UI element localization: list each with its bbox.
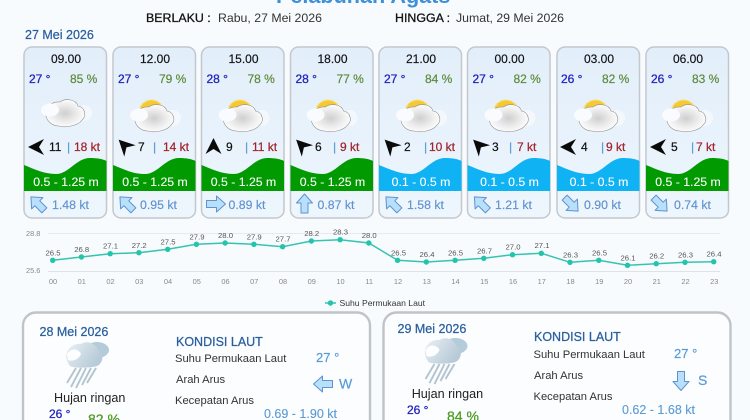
valid from: BERLAKU : xyxy=(146,11,211,25)
panel: 29 Mei 2026: 0.62 - 1.68 kt xyxy=(622,403,695,417)
line chart: sea surface temperature: 26.3 xyxy=(678,250,693,260)
icon: wind direction xyxy=(290,134,313,157)
panel: 18.00 forecast: 0.5 - 1.25 m xyxy=(300,175,365,189)
icon: light rain xyxy=(66,342,109,388)
line chart: sea surface temperature: 28.0 xyxy=(218,231,233,240)
panel: 00.00 forecast: 1.21 kt xyxy=(495,198,532,212)
line chart: sea surface temperature: 13 xyxy=(423,277,431,286)
panel: 03.00 forecast: 03.00 xyxy=(584,52,614,66)
panel: 15.00 forecast: 0.5 - 1.25 m xyxy=(211,175,276,189)
panel: 21.00 forecast: 84 % xyxy=(425,72,453,86)
line chart: sea surface temperature: 23 xyxy=(710,277,718,286)
panel: 28 Mei 2026: Hujan ringan xyxy=(54,391,125,405)
icon: partly cloudy xyxy=(306,100,358,132)
panel: 12.00 forecast: 0.5 - 1.25 m xyxy=(122,175,188,189)
panel: 03.00 forecast: 0.1 - 0.5 m xyxy=(570,175,628,189)
line chart: sea surface temperature: 26.5 xyxy=(592,248,607,258)
panel: 06.00 forecast: 7 kt xyxy=(696,140,716,154)
panel: 21.00 forecast: 1.58 kt xyxy=(407,198,444,212)
panel: 06.00 forecast: 06.00 xyxy=(673,52,703,66)
panel: 29 Mei 2026: KONDISI LAUT xyxy=(534,330,621,344)
icon: wind direction xyxy=(206,138,222,154)
panel: 28 Mei 2026: Arah Arus xyxy=(176,374,226,386)
panel: 00.00 forecast: 7 kt xyxy=(517,140,537,154)
panel: 03.00 forecast: 26 ° xyxy=(561,72,583,86)
panel: 15.00 forecast: | xyxy=(245,140,248,154)
line chart: sea surface temperature: 27.7 xyxy=(276,234,290,244)
panel: 29 Mei 2026 xyxy=(384,312,730,420)
panel: 15.00 forecast: 11 kt xyxy=(252,140,278,154)
panel: 12.00 forecast: 14 kt xyxy=(163,140,190,154)
line chart: sea surface temperature: 20 xyxy=(624,277,632,286)
line chart: sea surface temperature: 27.2 xyxy=(132,241,147,250)
line chart: sea surface temperature: 27.9 xyxy=(190,232,204,242)
panel: 28 Mei 2026 xyxy=(23,312,370,420)
panel: 18.00 forecast: 0.87 kt xyxy=(318,198,355,212)
line chart: sea surface temperature: 26.7 xyxy=(477,246,492,256)
panel: 00.00 forecast: 0.1 - 0.5 m xyxy=(480,175,539,189)
panel: 29 Mei 2026: Suhu Permukaan Laut xyxy=(534,349,646,361)
panel: 28 Mei 2026: Suhu Permukaan Laut xyxy=(175,353,287,365)
panel: 12.00 forecast xyxy=(113,47,196,218)
line chart: sea surface temperature: 26.3 xyxy=(563,250,578,260)
line chart: sea surface temperature: 22 xyxy=(681,277,690,286)
panel: 15.00 forecast: 15.00 xyxy=(228,52,259,66)
line chart: sea surface temperature: 26.1 xyxy=(621,254,635,262)
panel: 12.00 forecast: 12.00 xyxy=(140,52,170,66)
line chart: sea surface temperature: 14 xyxy=(451,277,460,286)
line chart: sea surface temperature: 26.2 xyxy=(649,252,664,260)
icon: current west xyxy=(314,376,332,392)
panel: 21.00 forecast: 0.1 - 0.5 m xyxy=(392,175,450,189)
line chart: sea surface temperature: 27.9 xyxy=(247,232,262,242)
icon: current direction xyxy=(559,192,584,217)
valid from date: Rabu, 27 Mei 2026 xyxy=(218,11,322,25)
line chart: sea surface temperature: 26.4 xyxy=(707,250,722,258)
panel: 29 Mei 2026: Arah Arus xyxy=(534,370,584,382)
icon: wind direction xyxy=(650,139,666,155)
icon: wind direction xyxy=(560,139,576,155)
panel: 12.00 forecast: 79 % xyxy=(159,72,187,86)
line chart: sea surface temperature: 00 xyxy=(49,277,57,286)
panel: 09.00 forecast: | xyxy=(67,140,70,154)
panel: 28 Mei 2026: W xyxy=(339,376,353,392)
panel: 03.00 forecast: | xyxy=(601,140,604,154)
panel: 21.00 forecast: 2 xyxy=(404,140,411,154)
icon: partly cloudy xyxy=(574,100,625,132)
line chart: sea surface temperature: 10 xyxy=(336,277,345,286)
line chart: sea surface temperature: 16 xyxy=(509,277,517,286)
panel: 09.00 forecast: 85 % xyxy=(70,72,98,86)
icon: current direction xyxy=(114,191,139,216)
panel: 29 Mei 2026: 29 Mei 2026 xyxy=(398,322,466,336)
line chart: sea surface temperature: 09 xyxy=(308,277,316,286)
line chart: sea surface temperature: 18 xyxy=(566,277,575,286)
icon: light rain xyxy=(425,338,468,384)
panel: 18.00 forecast xyxy=(290,47,373,218)
panel: 29 Mei 2026: S xyxy=(698,372,707,388)
panel: 03.00 forecast: 82 % xyxy=(602,72,630,86)
line chart: sea surface temperature: 12 xyxy=(394,277,402,286)
panel: 09.00 forecast xyxy=(24,47,106,218)
panel: 09.00 forecast: 1.48 kt xyxy=(52,198,89,212)
line chart: sea surface temperature: 02 xyxy=(106,277,115,286)
chart legend: Suhu Permukaan Laut xyxy=(340,298,426,308)
panel: 06.00 forecast xyxy=(646,47,728,218)
icon: current direction xyxy=(206,196,226,212)
panel: 18.00 forecast: 77 % xyxy=(336,72,364,86)
line chart: sea surface temperature: 06 xyxy=(221,277,230,286)
line chart: sea surface temperature: 19 xyxy=(595,277,603,286)
line chart: sea surface temperature: 15 xyxy=(480,277,488,286)
icon: wind direction xyxy=(113,134,136,157)
panel: 06.00 forecast: 26 ° xyxy=(651,72,673,86)
line chart: sea surface temperature: 27.5 xyxy=(161,238,175,246)
panel: 00.00 forecast: 00.00 xyxy=(494,52,525,66)
panel: 00.00 forecast: | xyxy=(509,140,512,154)
line chart: sea surface temperature: 27.0 xyxy=(506,242,520,252)
panel: 12.00 forecast: 0.95 kt xyxy=(140,198,177,212)
panel: 21.00 forecast: 21.00 xyxy=(406,52,436,66)
panel: 12.00 forecast: | xyxy=(153,140,156,154)
valid until: HINGGA : xyxy=(395,11,450,25)
line chart: sea surface temperature: 07 xyxy=(250,277,258,286)
panel: 18.00 forecast: 18.00 xyxy=(317,52,348,66)
icon: wind direction xyxy=(28,139,44,155)
panel: 21.00 forecast: 10 kt xyxy=(429,140,456,154)
line chart: sea surface temperature: 21 xyxy=(653,277,661,286)
panel: 00.00 forecast xyxy=(467,47,550,218)
line chart: sea surface temperature: 01 xyxy=(78,277,86,286)
panel: 03.00 forecast: 4 xyxy=(581,140,588,154)
panel: 18.00 forecast: 6 xyxy=(315,140,322,154)
line chart: sea surface temperature: 28.2 xyxy=(304,229,319,238)
panel: 29 Mei 2026: 26 ° xyxy=(407,403,429,417)
panel: 12.00 forecast: 27 ° xyxy=(118,72,140,86)
icon: current direction xyxy=(648,192,673,217)
line chart: sea surface temperature: 04 xyxy=(164,277,172,286)
icon: partly cloudy xyxy=(396,100,447,132)
line chart: sea surface temperature: 05 xyxy=(193,277,201,286)
icon: current direction xyxy=(469,191,494,216)
line chart: sea surface temperature: 28.3 xyxy=(333,228,348,236)
panel: 28 Mei 2026: KONDISI LAUT xyxy=(176,335,263,349)
panel: 18.00 forecast: 9 kt xyxy=(340,140,360,154)
icon: partly cloudy xyxy=(130,100,181,132)
panel: 03.00 forecast xyxy=(557,47,640,218)
panel: 15.00 forecast: 28 ° xyxy=(206,72,228,86)
panel: 09.00 forecast: 11 xyxy=(49,140,62,154)
icon: wind direction xyxy=(467,134,490,157)
panel: 15.00 forecast: 9 xyxy=(226,140,233,154)
panel: 03.00 forecast: 9 kt xyxy=(606,140,626,154)
line chart: sea surface temperature: 26.5 xyxy=(448,248,463,258)
line chart: sea surface temperature: 27.1 xyxy=(103,242,118,250)
icon: current south xyxy=(673,372,689,390)
panel: 15.00 forecast: 78 % xyxy=(248,72,275,86)
panel: 18.00 forecast: | xyxy=(333,140,336,154)
icon: wind direction xyxy=(379,134,402,157)
panel: 21.00 forecast: | xyxy=(424,140,427,154)
icon: current direction xyxy=(296,194,312,213)
icon: current direction xyxy=(380,191,405,216)
line chart: sea surface temperature xyxy=(26,228,722,286)
panel: 09.00 forecast: 0.5 - 1.25 m xyxy=(33,175,99,189)
panel: 18.00 forecast: 28 ° xyxy=(296,72,317,86)
valid until date: Jumat, 29 Mei 2026 xyxy=(456,11,564,25)
panel: 29 Mei 2026: Hujan ringan xyxy=(412,387,483,401)
panel: 12.00 forecast: 7 xyxy=(138,140,145,154)
line chart: sea surface temperature: 08 xyxy=(279,277,287,286)
line chart: sea surface temperature: 28.8 xyxy=(26,229,40,238)
panel: 09.00 forecast: 18 kt xyxy=(74,140,101,154)
panel: 15.00 forecast xyxy=(202,47,284,218)
panel: 00.00 forecast: 3 xyxy=(492,140,499,154)
panel: 00.00 forecast: 27 ° xyxy=(472,72,494,86)
line chart: sea surface temperature: 26.5 xyxy=(391,248,406,258)
panel: 00.00 forecast: 82 % xyxy=(514,72,541,86)
line chart: sea surface temperature: 17 xyxy=(538,277,546,286)
panel: 06.00 forecast: 0.74 kt xyxy=(674,198,711,212)
icon: partly cloudy xyxy=(484,100,536,132)
panel: 21.00 forecast: 27 ° xyxy=(384,72,406,86)
panel: 29 Mei 2026: 27 ° xyxy=(674,346,697,361)
line chart: sea surface temperature: 26.8 xyxy=(74,245,89,254)
icon: cloudy xyxy=(41,100,92,127)
validity header xyxy=(146,11,564,25)
panel: 06.00 forecast: 0.5 - 1.25 m xyxy=(655,175,721,189)
panel: 28 Mei 2026: 28 Mei 2026 xyxy=(40,325,108,339)
panel: 28 Mei 2026: 27 ° xyxy=(316,350,339,365)
line chart: sea surface temperature: 11 xyxy=(365,277,373,286)
icon: partly cloudy xyxy=(218,100,270,132)
panel: 03.00 forecast: 0.90 kt xyxy=(584,198,621,212)
line chart: sea surface temperature: 26.4 xyxy=(420,250,435,259)
line chart: sea surface temperature: 27.1 xyxy=(535,241,549,250)
icon: partly cloudy xyxy=(662,100,713,132)
line chart: sea surface temperature: 03 xyxy=(135,277,143,286)
line chart: sea surface temperature: 25.6 xyxy=(26,266,40,275)
panel: 21.00 forecast xyxy=(379,47,462,218)
panel: 06.00 forecast: 5 xyxy=(671,140,678,154)
date heading: 27 Mei 2026 xyxy=(25,28,94,42)
panel: 06.00 forecast: | xyxy=(691,140,694,154)
panel: 29 Mei 2026: Kecepatan Arus xyxy=(534,391,613,403)
panel: 06.00 forecast: 83 % xyxy=(692,72,720,86)
line chart: sea surface temperature: 28.0 xyxy=(362,231,377,240)
panel: 09.00 forecast: 27 ° xyxy=(29,72,51,86)
panel: 15.00 forecast: 0.89 kt xyxy=(228,198,266,212)
panel: 28 Mei 2026: Kecepatan Arus xyxy=(175,395,254,407)
panel: 09.00 forecast: 09.00 xyxy=(51,52,81,66)
icon: current direction xyxy=(25,191,50,216)
line chart: sea surface temperature: 26.5 xyxy=(46,248,60,258)
